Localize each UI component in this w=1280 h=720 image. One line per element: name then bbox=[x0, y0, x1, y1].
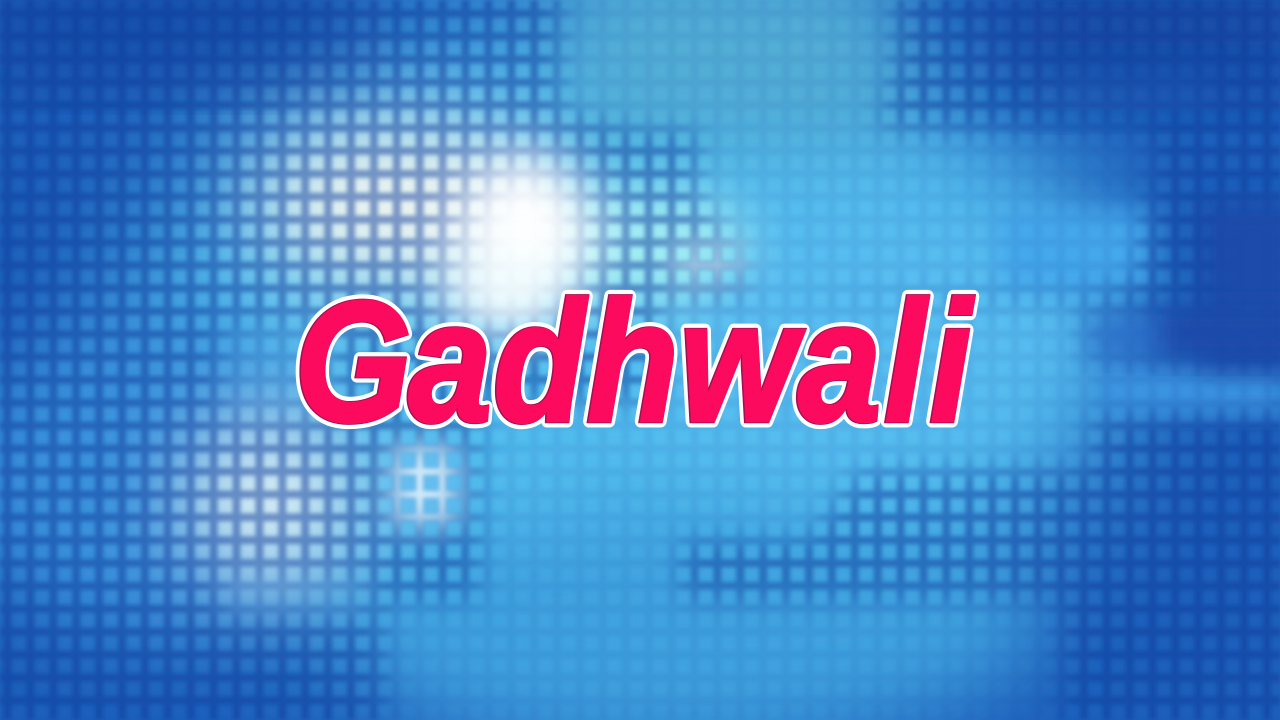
background: white flare bbox=[440, 155, 593, 332]
title: Gadhwali bbox=[294, 267, 974, 458]
title: Gadhwali bbox=[294, 267, 974, 458]
background: inverted white-line grid patch bbox=[371, 230, 756, 546]
title: Gadhwali bbox=[295, 267, 975, 458]
background: bright land glow bbox=[180, 120, 750, 585]
